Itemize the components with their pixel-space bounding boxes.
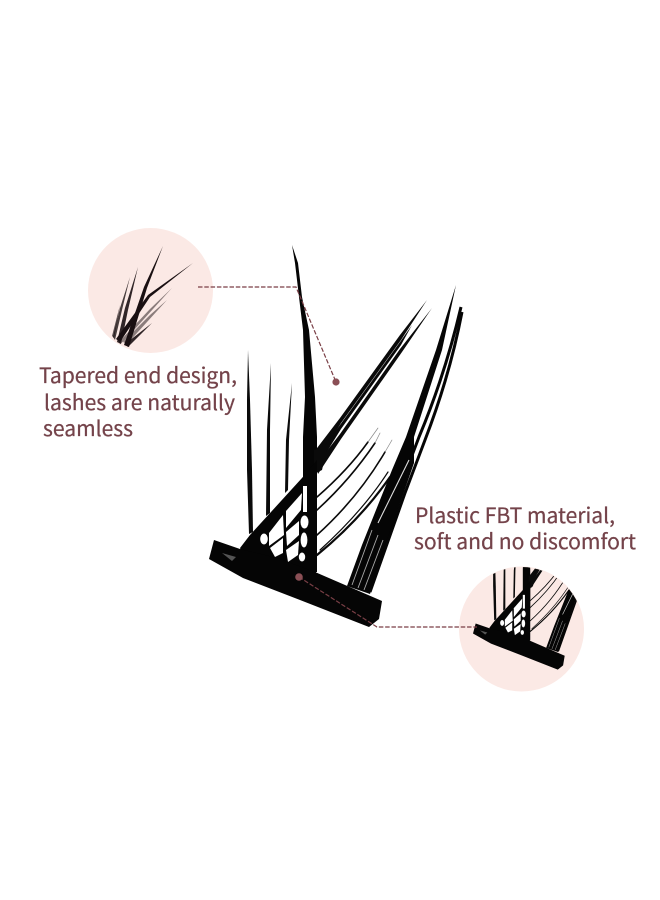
text: tapered end caption: [39, 360, 237, 443]
text: plastic FBT caption: soft and no discomfort: [414, 526, 636, 556]
callout line: band: [295, 573, 477, 627]
text: tapered end caption: Tapered end design,: [39, 360, 237, 390]
panel: band detail circle: [459, 566, 584, 692]
text: plastic FBT caption: [414, 500, 636, 556]
illustration: main lash cluster: [209, 245, 462, 627]
text: tapered end caption: lashes are naturally: [44, 387, 235, 417]
panel: tapered end detail circle: [88, 228, 213, 353]
icon: tapered lash tips: [112, 246, 193, 347]
text: tapered end caption: seamless: [43, 413, 133, 443]
text: plastic FBT caption: Plastic FBT material,: [415, 500, 615, 530]
callout line: tapered end: [198, 287, 340, 386]
icon: zoomed lash band: [473, 567, 577, 670]
